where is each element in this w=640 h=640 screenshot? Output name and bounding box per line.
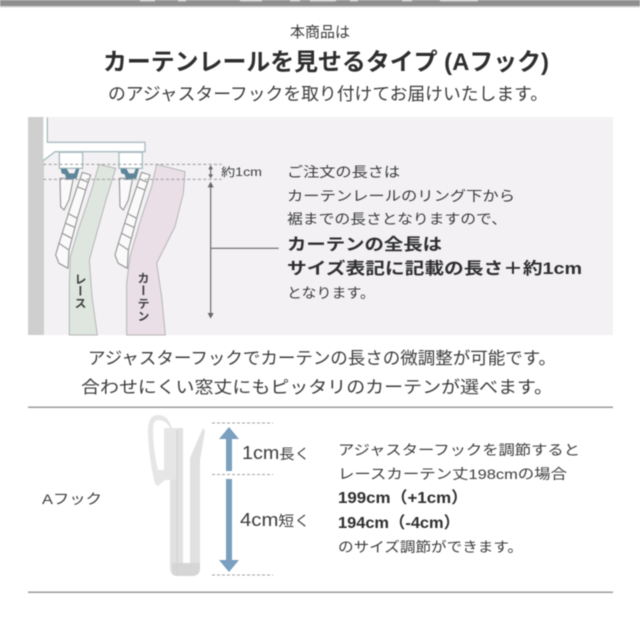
adjustment example text: のサイズ調節ができます。 [338,539,523,555]
label: lace: レース [73,273,87,309]
explanation text: カーテンの全長は [287,234,442,254]
icon: adjuster hook [148,415,205,576]
explanation text [287,164,582,301]
heading block: のアジャスターフックを取り付けてお届けいたします。 [108,84,548,104]
explanation text: となります。 [287,285,375,301]
adjustment description [81,349,556,397]
top banner strip [0,0,640,8]
explanation text: カーテンレールのリング下から [287,188,515,204]
adjustment example text: 194cm（-4cm） [338,514,460,532]
panel: curtain length explanation [28,117,613,335]
explanation text: ご注文の長さは [287,164,400,180]
label: A hook: Aフック [42,491,102,507]
heading block: カーテンレールを見せるタイプ (Aフック) [103,49,549,76]
diagram: rail, hooks and curtains [43,117,279,335]
label: about 1cm: 約1cm [221,165,262,179]
heading block [103,24,549,104]
adjustment example text: レースカーテン丈198cmの場合 [338,466,567,482]
scale: dashed markers and blue arrows [212,423,273,575]
label: 4cm shorter: 4cm 短く [240,510,310,530]
adjustment example text [338,442,580,555]
adjustment example text: 199cm（+1cm） [338,489,468,507]
label: 1cm longer: 1cm長く [242,443,310,463]
label: curtain: カーテン [136,272,150,322]
heading block: 本商品は [290,24,350,41]
adjustment description: アジャスターフックでカーテンの長さの微調整が可能です。 [88,349,556,368]
adjustment example text: アジャスターフックを調節すると [338,442,580,458]
adjustment description: 合わせにくい窓丈にもピッタリのカーテンが選べます。 [81,378,553,397]
explanation text: サイズ表記に記載の長さ＋約1cm [287,258,582,278]
explanation text: 裾までの長さとなりますので、 [287,211,507,227]
